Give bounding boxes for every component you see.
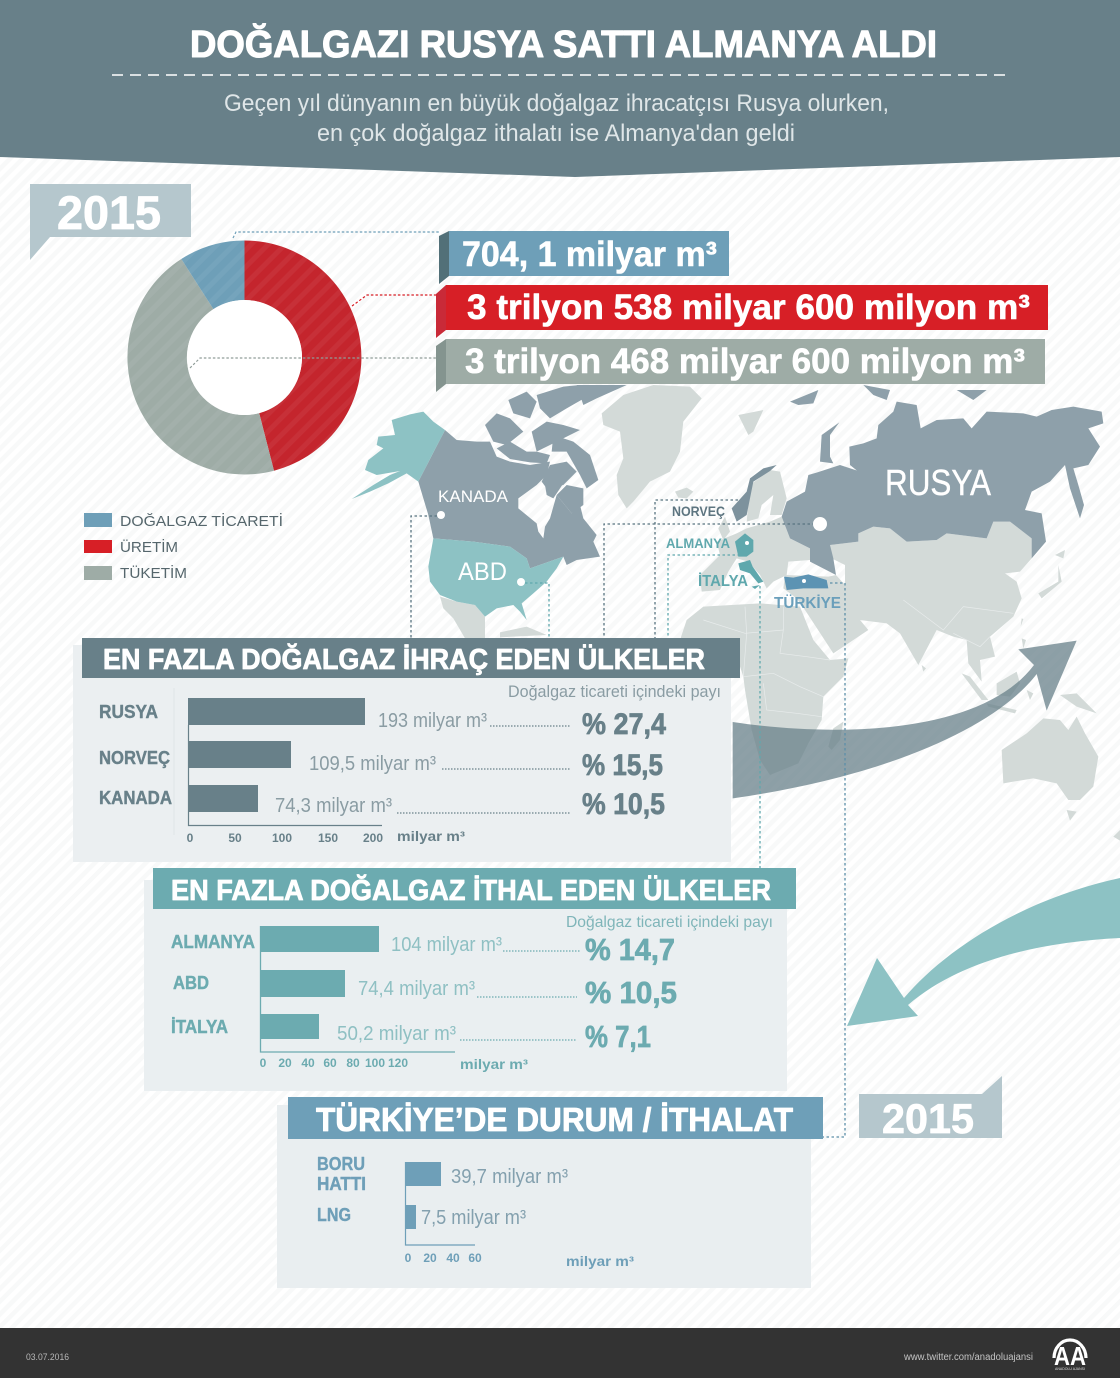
bar chart: import: 40 bbox=[301, 1056, 315, 1070]
dotted connector lines bbox=[411, 500, 845, 1137]
icon: AA logo: ANADOLU AJANSI bbox=[1055, 1367, 1085, 1371]
bar chart: import: 80 bbox=[346, 1056, 360, 1070]
bar chart: Türkiye: 0 bbox=[405, 1251, 412, 1265]
segment: tüketim bbox=[127, 259, 274, 474]
bar chart: import: 120 bbox=[388, 1056, 408, 1070]
map: Greenland and Mexico bbox=[440, 385, 702, 638]
map label: Kanada bbox=[437, 487, 509, 519]
legend: ÜRETİM bbox=[120, 538, 178, 556]
bar chart: import: 50,2 milyar m³ bbox=[337, 1023, 456, 1045]
map label: Türkiye bbox=[774, 579, 841, 612]
icon: AA logo: AA bbox=[1054, 1341, 1086, 1371]
bar chart: export: % 27,4 bbox=[582, 708, 666, 741]
map label: Rusya bbox=[813, 462, 991, 531]
bar chart: Türkiye: HATTI bbox=[317, 1174, 366, 1194]
bar chart: export: 193 milyar m³ bbox=[378, 710, 487, 732]
bar chart: import: % 14,7 bbox=[585, 932, 675, 967]
panel: export bbox=[73, 638, 740, 862]
bar chart: import: 74,4 milyar m³ bbox=[358, 978, 475, 1000]
bar chart: Türkiye: 7,5 milyar m³ bbox=[421, 1207, 526, 1229]
bar chart: export: 200 bbox=[363, 831, 383, 845]
map: Türkiye bbox=[784, 574, 828, 590]
bar chart: Türkiye: 20 bbox=[423, 1251, 437, 1265]
map label: ABD: ABD bbox=[458, 558, 507, 586]
value ribbon: tüketim bbox=[436, 339, 1045, 392]
header band bbox=[0, 0, 1120, 177]
bar chart: Türkiye: 40 bbox=[446, 1251, 460, 1265]
donut leader lines bbox=[190, 232, 440, 368]
map: Asia and Europe bbox=[700, 410, 1065, 682]
bar chart: export: milyar m³ bbox=[397, 828, 465, 844]
bar chart: import: 100 bbox=[365, 1056, 385, 1070]
subtitle: en çok doğalgaz ithalatı ise Almanya'dan geldi bbox=[317, 120, 795, 147]
bar chart: Türkiye: milyar m³ bbox=[566, 1253, 634, 1269]
bar chart: import: 104 milyar m³ bbox=[391, 934, 502, 956]
map: Almanya bbox=[735, 533, 753, 557]
year tag 2015 (Türkiye) bbox=[859, 1076, 1002, 1142]
bar chart: export: RUSYA bbox=[99, 702, 158, 722]
panel: Türkiye bbox=[277, 1097, 823, 1288]
heading: Türkiye: TÜRKİYE’DE DURUM / İTHALAT bbox=[316, 1101, 793, 1138]
map label: Rusya: RUSYA bbox=[885, 462, 991, 503]
heading: import: EN FAZLA DOĞALGAZ İTHAL EDEN ÜLKELER bbox=[171, 873, 771, 907]
legend: DOĞALGAZ TİCARETİ bbox=[120, 512, 283, 530]
bar chart: import: % 10,5 bbox=[585, 975, 677, 1010]
date: 03.07.2016 bbox=[26, 1352, 69, 1363]
bar chart: export: 0 bbox=[187, 831, 194, 845]
bar chart: export: 50 bbox=[228, 831, 242, 845]
year tag 2015 bbox=[30, 184, 191, 260]
bar chart: export: 74,3 milyar m³ bbox=[275, 795, 392, 817]
value ribbon: üretim bbox=[436, 285, 1048, 338]
bar chart: export bbox=[99, 688, 666, 845]
heading: export: EN FAZLA DOĞALGAZ İHRAÇ EDEN ÜLKELER bbox=[103, 642, 705, 676]
bar chart: Türkiye bbox=[317, 1154, 634, 1269]
arrow: export bbox=[733, 641, 1077, 798]
map: Norveç bbox=[732, 465, 777, 522]
map label: Kanada: KANADA bbox=[438, 487, 509, 506]
world map bbox=[352, 385, 1120, 841]
bar chart: import: ALMANYA bbox=[171, 932, 255, 952]
bar chart: Türkiye: 39,7 milyar m³ bbox=[451, 1166, 568, 1188]
bar chart: export: 150 bbox=[318, 831, 338, 845]
value ribbon: tüketim: 3 trilyon 468 milyar 600 milyon m³ bbox=[465, 342, 1025, 381]
map label: Almanya: ALMANYA bbox=[666, 535, 730, 551]
year tag 2015: 2015 bbox=[57, 186, 161, 239]
subtitle: Geçen yıl dünyanın en büyük doğalgaz ihracatçısı Rusya olurken, bbox=[224, 90, 889, 117]
map: Alaska bbox=[352, 412, 445, 499]
bar chart: import: ABD bbox=[173, 973, 209, 993]
bar chart: import: 20 bbox=[278, 1056, 292, 1070]
map label: İtalya: İTALYA bbox=[698, 572, 748, 590]
subtitle bbox=[224, 90, 889, 147]
bar chart: Türkiye: BORU bbox=[317, 1154, 365, 1174]
url: www.twitter.com/anadoluajansi bbox=[903, 1352, 1033, 1363]
bar chart: export: KANADA bbox=[99, 788, 172, 808]
map label: Norveç: NORVEÇ bbox=[672, 503, 725, 519]
share caption: Doğalgaz ticareti içindeki payı bbox=[566, 914, 773, 931]
bar chart: export: NORVEÇ bbox=[99, 748, 170, 768]
legend: TÜKETİM bbox=[120, 564, 187, 582]
value ribbon: ticaret bbox=[439, 231, 729, 284]
bar chart: import: % 7,1 bbox=[585, 1019, 651, 1054]
bar chart: import: İTALYA bbox=[171, 1017, 228, 1037]
map: İtalya bbox=[738, 560, 763, 589]
value ribbon: ticaret: 704, 1 milyar m³ bbox=[462, 235, 717, 274]
year tag 2015 (Türkiye): 2015 bbox=[882, 1095, 974, 1142]
map: Eurasia bbox=[700, 385, 1103, 682]
bar chart: export: % 15,5 bbox=[582, 749, 663, 782]
bar chart: export: 100 bbox=[272, 831, 292, 845]
bar chart: import: 0 bbox=[260, 1056, 267, 1070]
bar chart: import bbox=[171, 926, 677, 1072]
donut chart bbox=[127, 240, 362, 474]
bar chart: export: % 10,5 bbox=[582, 788, 665, 821]
segment: üretim bbox=[244, 240, 361, 471]
map: Canada bbox=[418, 385, 627, 568]
panel: import bbox=[144, 868, 796, 1091]
share caption: Doğalgaz ticareti içindeki payı bbox=[508, 683, 721, 701]
segment: ticaret bbox=[181, 240, 244, 309]
bar chart: import: 60 bbox=[323, 1056, 337, 1070]
map label: Türkiye: TÜRKİYE bbox=[774, 593, 841, 612]
map: Rusya bbox=[782, 385, 1103, 575]
bar chart: Türkiye: LNG bbox=[317, 1205, 351, 1225]
bar chart: import: milyar m³ bbox=[460, 1056, 528, 1072]
value ribbon: üretim: 3 trilyon 538 milyar 600 milyon m³ bbox=[467, 288, 1030, 327]
arrow: import bbox=[847, 878, 1120, 1026]
bar chart: export: 109,5 milyar m³ bbox=[309, 753, 436, 775]
map: ABD bbox=[428, 538, 563, 620]
footer bbox=[0, 1328, 1120, 1378]
map: North America bbox=[352, 385, 702, 638]
map: Africa, Oceania bbox=[680, 600, 1120, 841]
bar chart: Türkiye: 60 bbox=[468, 1251, 482, 1265]
title: DOĞALGAZI RUSYA SATTI ALMANYA ALDI bbox=[190, 22, 937, 66]
legend bbox=[84, 512, 283, 582]
